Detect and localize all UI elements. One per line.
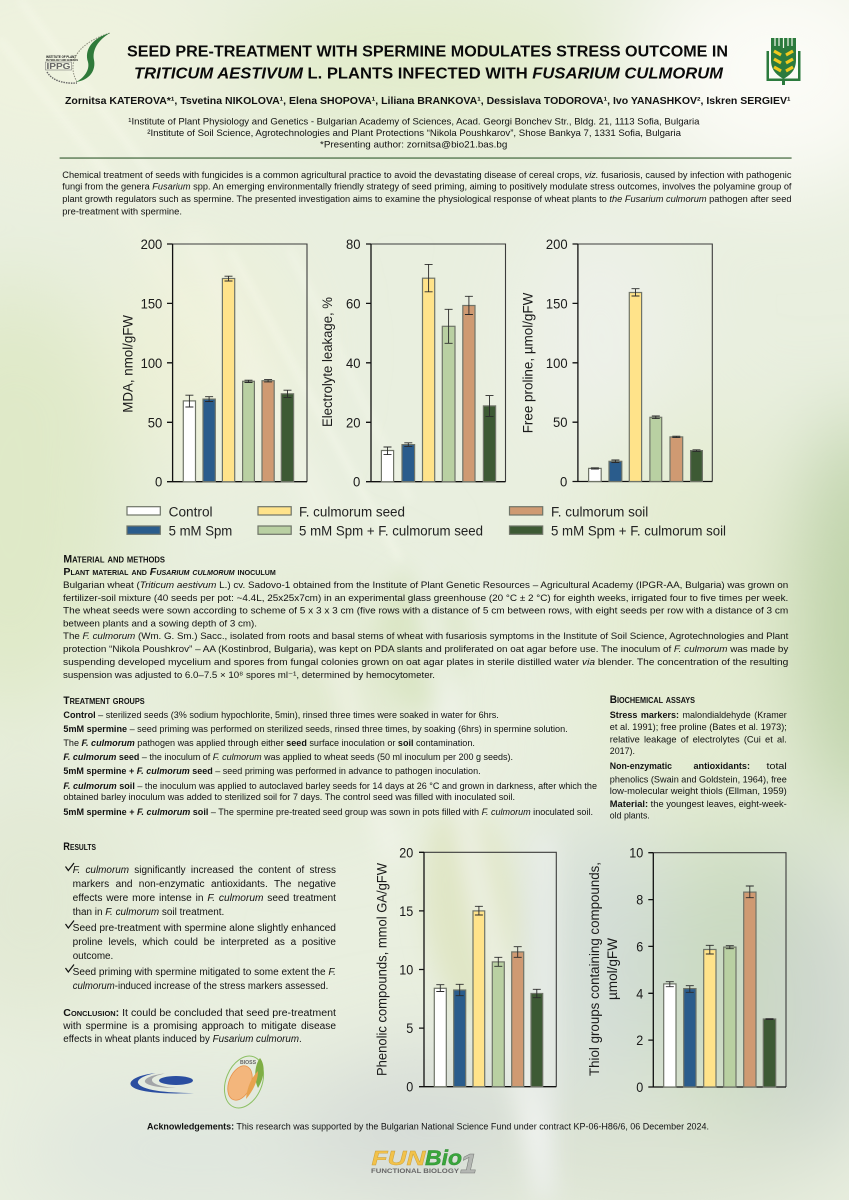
introduction text: pre-treatment with spermine. bbox=[62, 207, 182, 217]
conclusion bbox=[62, 1008, 336, 1045]
axis labels: phenolic compounds bbox=[374, 844, 413, 1095]
introduction text: Chemical treatment of seeds with fungicides is a common agricultural practice to avoid the devastating disease of cereal crops, viz. fusariosis, caused by infection with pathogenic bbox=[62, 170, 792, 180]
results: Seed pre-treatment with spermine alone slightly enhanced bbox=[73, 923, 336, 934]
divider bbox=[60, 157, 792, 159]
logo: BIOSS: BIOSS bbox=[240, 1060, 257, 1066]
bars: electrolyte leakage bbox=[381, 264, 496, 482]
biochemical assays: total bbox=[766, 761, 787, 771]
legend: Control bbox=[169, 504, 213, 519]
axis labels: electrolyte leakage bbox=[320, 236, 361, 490]
affiliations bbox=[128, 116, 700, 150]
axis labels: free proline: 100 bbox=[546, 355, 568, 371]
legend: 5 mM Spm + F. culmorum soil bbox=[551, 523, 726, 538]
material and methods: Material and methods bbox=[63, 554, 166, 566]
logo: BIOSS bbox=[217, 1050, 271, 1114]
axis labels: MDA: 0 bbox=[155, 474, 162, 490]
axis labels: phenolic compounds: 15 bbox=[399, 903, 413, 919]
results: outcome. bbox=[73, 951, 113, 962]
legend: F. culmorum seed bbox=[299, 504, 405, 519]
treatment groups: F. culmorum seed – the inoculum of F. culmorum was applied to wheat seeds (50 ml inoculum per 200 g seeds). bbox=[63, 752, 513, 762]
material and methods: The F. culmorum (Wm. G. Sm.) Sacc., isolated from roots and basal stems of wheat with fusariosis symptoms in the Institute of Soil Science, Agrotechnologies and Plant bbox=[63, 631, 789, 641]
axis labels: MDA: 100 bbox=[141, 355, 162, 371]
results: Seed priming with spermine mitigated to some extent the F. bbox=[73, 967, 336, 978]
bars: phenolic compounds bbox=[434, 906, 543, 1087]
axis labels: thiol groups: Thiol groups containing compounds, bbox=[587, 862, 602, 1076]
treatment groups: Control – sterilized seeds (3% sodium hypochlorite, 5min), rinsed three times were soaked in water for 6hrs. bbox=[63, 710, 499, 720]
affiliations: ¹Institute of Plant Physiology and Genetics - Bulgarian Academy of Sciences, Acad. Georgi Bonchev Str., Bldg. 21, 1113 Sofia, Bulgaria bbox=[128, 116, 700, 127]
logo: FunBio 1: FUNCTIONAL BIOLOGY bbox=[371, 1168, 460, 1175]
axis labels: thiol groups: 6 bbox=[636, 938, 643, 954]
axis labels: phenolic compounds: Phenolic compounds, mmol GA/gFW bbox=[374, 863, 389, 1076]
axis labels: MDA: 200 bbox=[141, 236, 162, 252]
icon: check mark 1 bbox=[66, 863, 74, 870]
logo: Institute of Plant Physiology and Genetics bbox=[46, 33, 110, 83]
logo: FunBio 1: 1 bbox=[460, 1148, 477, 1179]
axis labels: MDA: MDA, nmol/gFW bbox=[120, 315, 136, 413]
bars: MDA bbox=[183, 276, 294, 482]
chart: phenolic compounds bbox=[374, 844, 556, 1095]
results: Results bbox=[63, 841, 97, 853]
axis labels: electrolyte leakage: 60 bbox=[346, 295, 361, 311]
logo: FunBio 1: Bio bbox=[425, 1147, 462, 1170]
axis labels: free proline: 200 bbox=[546, 236, 568, 252]
treatment groups: The F. culmorum pathogen was applied through either seed surface inoculation or soil contamination. bbox=[63, 738, 475, 748]
material and methods: suspension was adjusted to 6.0–7.5 × 10⁸ spores ml⁻¹, determined by hemocytometer. bbox=[63, 670, 435, 680]
conclusion: with spermine is a promising approach to mitigate disease bbox=[62, 1021, 336, 1032]
logo: wheat ear in open book bbox=[766, 38, 800, 85]
axis labels: free proline: Free proline, µmol/gFW bbox=[520, 292, 536, 433]
logo: FunBio 1 bbox=[371, 1147, 477, 1179]
logo: FunBio 1: FUN bbox=[372, 1148, 426, 1170]
bars: free proline bbox=[589, 289, 702, 482]
biochemical assays: relative leakage of electrolytes (Cui et al. bbox=[610, 734, 787, 744]
material and methods: Bulgarian wheat ( Triticum aestivum L.) cv. Sadovo-1 obtained from the Institute of Plant Genetic Resources – Agricultural Academy (IPGR-AA, Bulgaria) was grown on bbox=[63, 580, 788, 590]
chart: electrolyte leakage bbox=[320, 236, 506, 490]
axis labels: free proline: 150 bbox=[546, 295, 568, 311]
axis labels: electrolyte leakage: 80 bbox=[346, 236, 361, 252]
legend: 5 mM Spm + F. culmorum seed bbox=[299, 523, 483, 538]
axis labels: free proline: 50 bbox=[553, 414, 568, 430]
conclusion: Conclusion: It could be concluded that seed pre-treatment bbox=[63, 1008, 336, 1019]
chart: free proline bbox=[520, 236, 712, 490]
results: than in F. culmorum soil treatment. bbox=[73, 907, 224, 918]
material and methods: The wheat seeds were sown according to scheme of 5 x 3 x 3 cm (five rows with a distance of 5 cm between rows, with eight seeds per row with a distance of 3 cm bbox=[63, 606, 789, 616]
axis labels: electrolyte leakage: 0 bbox=[353, 474, 360, 490]
results: culmorum-induced increase of the stress markers assessed. bbox=[73, 981, 328, 992]
biochemical assays: Biochemical assays bbox=[610, 694, 696, 706]
axis labels: thiol groups: 4 bbox=[636, 985, 643, 1001]
axis labels: electrolyte leakage: Electrolyte leakage, % bbox=[320, 297, 335, 427]
chart: MDA bbox=[120, 236, 307, 490]
axis labels: thiol groups bbox=[587, 845, 643, 1095]
authors: Zornitsa KATEROVA*¹, Tsvetina NIKOLOVA¹, Elena SHOPOVA¹, Liliana BRANKOVA¹, Dessislava TODOROVA¹, Ivo YANASHKOV², Iskren SERGIEV¹ bbox=[65, 96, 791, 107]
affiliations: *Presenting author: zornitsa@bio21.bas.bg bbox=[320, 139, 507, 150]
treatment groups: obtained barley inoculum was added to sterilized soil for 7 days. The control seed was filled with inoculated soil. bbox=[63, 792, 515, 802]
bars: thiol groups bbox=[664, 886, 776, 1087]
material and methods: fertilizer-soil mixture (40 seeds per pot: ~4.4L, 25x25x7cm) in an experimental glass greenhouse (20 °C ± 2 °C) for eighth weeks, irrigated four to five times per week. bbox=[63, 593, 788, 603]
axis labels: free proline: 0 bbox=[560, 474, 567, 490]
axis labels: phenolic compounds: 10 bbox=[399, 962, 413, 978]
axis labels: thiol groups: 0 bbox=[636, 1079, 643, 1095]
treatment groups: F. culmorum soil – the inoculum was applied to autoclaved barley seeds for 14 days at 26 °C and grown in darkness, after which the bbox=[63, 781, 597, 791]
logo: Institute of Plant Physiology and Genetics: IPPG bbox=[46, 62, 70, 71]
axis labels: MDA bbox=[120, 236, 162, 490]
treatment groups bbox=[63, 695, 597, 817]
material and methods: Plant material and Fusarium culmorum inoculum bbox=[63, 566, 276, 578]
axis labels: thiol groups: 2 bbox=[636, 1032, 643, 1048]
biochemical assays bbox=[610, 694, 787, 820]
logo: Institute of Plant Physiology and Genetics: PHYSIOLOGY AND GENETICS bbox=[46, 58, 78, 62]
results: effects were more intense in F. culmorum seed treatment bbox=[73, 893, 336, 904]
biochemical assays: antioxidants: bbox=[694, 761, 750, 771]
axis labels: electrolyte leakage: 20 bbox=[346, 414, 361, 430]
axis labels: phenolic compounds: 0 bbox=[406, 1079, 413, 1095]
logo: blue swoosh bbox=[130, 1073, 194, 1093]
results: proline levels, which could be interpreted as a positive bbox=[73, 937, 336, 948]
results: F. culmorum significantly increased the content of stress bbox=[73, 865, 336, 876]
axis labels: MDA: 50 bbox=[148, 414, 162, 430]
legend: F. culmorum soil bbox=[551, 504, 648, 519]
biochemical assays: low-molecular weight thiols (Ellman, 1959) bbox=[610, 786, 787, 796]
material and methods: suspending developed mycelium and spores from fungal colonies grown on oat agar plates in sterile distilled water via blender. The concentration of the resulting bbox=[63, 657, 788, 667]
results bbox=[63, 841, 336, 992]
material and methods: protection “Nikola Poushkrov” – AA (Kostinbrod, Bulgaria), was kept on PDA slants and proliferated on oat agar before use. The inoculum of F. culmorum was made by bbox=[63, 644, 789, 654]
material and methods: between plants and a sowing depth of 3 cm). bbox=[63, 618, 257, 628]
acknowledgements: Acknowledgements: This research was supported by the Bulgarian National Science Fund under contract KP-06-H86/6, 06 December 2024. bbox=[147, 1122, 709, 1132]
title bbox=[127, 44, 728, 82]
treatment groups: 5mM spermine + F. culmorum seed – seed priming was performed in advance to pathogen inoculation. bbox=[63, 766, 481, 776]
axis labels: electrolyte leakage: 40 bbox=[346, 355, 361, 371]
biochemical assays: 2017). bbox=[610, 746, 635, 756]
conclusion: effects in wheat plants induced by Fusarium culmorum. bbox=[63, 1034, 302, 1045]
material and methods bbox=[63, 554, 789, 680]
affiliations: ²Institute of Soil Science, Agrotechnologies and Plant Protections “Nikola Poushkarov”, Shose Bankya 7, 1331 Sofia, Bulgaria bbox=[147, 127, 682, 138]
legend: 5 mM Spm bbox=[169, 523, 232, 538]
axis labels: MDA: 150 bbox=[141, 295, 162, 311]
icon: check mark 3 bbox=[66, 964, 74, 972]
biochemical assays: Stress markers: malondialdehyde (Kramer bbox=[610, 710, 787, 720]
axis labels: free proline bbox=[520, 236, 568, 490]
treatment groups: 5mM spermine – seed priming was performed on sterilized seeds, rinsed three times, by soaking (6hrs) in spermine solution. bbox=[63, 724, 568, 734]
axis labels: phenolic compounds: 20 bbox=[399, 844, 413, 860]
results: markers and non-enzymatic antioxidants. The negative bbox=[73, 879, 336, 890]
biochemical assays: old plants. bbox=[610, 810, 650, 820]
treatment groups: Treatment groups bbox=[63, 695, 145, 707]
treatment groups: 5mM spermine + F. culmorum soil – The spermine pre-treated seed group was sown in pots filled with F. culmorum inoculated soil. bbox=[63, 807, 593, 817]
biochemical assays: et al. 1991); free proline (Bates et al. 1973); bbox=[610, 722, 787, 732]
title: SEED PRE-TREATMENT WITH SPERMINE MODULATES STRESS OUTCOME IN bbox=[127, 44, 728, 61]
logo: Institute of Plant Physiology and Genetics: INSTITUTE OF PLANT bbox=[46, 55, 77, 59]
introduction text: fungi from the genera Fusarium spp. An emerging environmentally friendly strategy of seed priming, aiming to positively modulate stress outcomes, involves the polyamine group of bbox=[62, 182, 792, 192]
axis labels: thiol groups: µmol/gFW bbox=[605, 938, 620, 1000]
introduction text: plant growth regulators such as spermine. The presented investigation aims to examine the physiological response of wheat plants to the Fusarium culmorum pathogen after seed bbox=[62, 194, 791, 204]
axis labels: thiol groups: 10 bbox=[629, 845, 643, 861]
legend bbox=[127, 504, 726, 538]
title: TRITICUM AESTIVUM L. PLANTS INFECTED WITH FUSARIUM CULMORUM bbox=[134, 65, 724, 82]
biochemical assays: Non-enzymatic bbox=[610, 761, 672, 771]
chart: thiol groups bbox=[587, 845, 786, 1095]
axis labels: phenolic compounds: 5 bbox=[406, 1020, 413, 1036]
axis labels: thiol groups: 8 bbox=[636, 892, 643, 908]
biochemical assays: Material: the youngest leaves, eight-week- bbox=[610, 799, 787, 809]
biochemical assays: phenolics (Swain and Goldstein, 1964), free bbox=[610, 774, 787, 784]
icon: check mark 2 bbox=[66, 920, 74, 928]
introduction text bbox=[62, 170, 792, 217]
